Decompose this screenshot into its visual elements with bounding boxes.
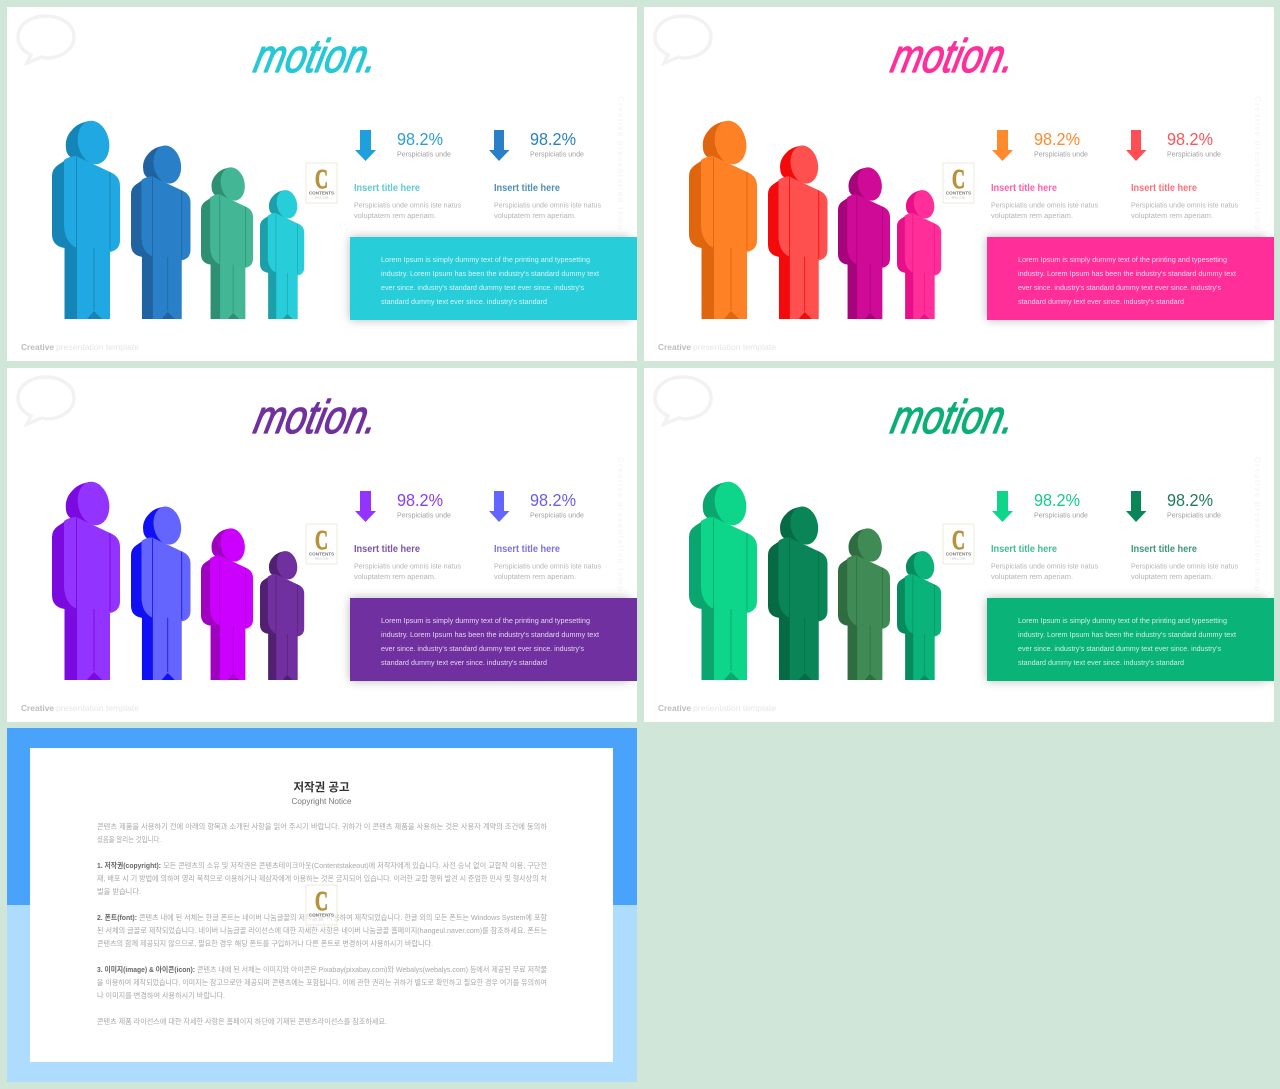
notice heading xyxy=(292,780,352,806)
text block 1 xyxy=(991,544,1098,581)
footer xyxy=(21,343,140,352)
footer: Creative xyxy=(21,704,55,713)
stat 1 xyxy=(1034,490,1088,520)
icon: down arrow 1 xyxy=(992,491,1013,522)
logo: C xyxy=(315,886,328,916)
section 2: 콘텐츠 내에 된 서체는 한글 폰트는 네이버 나눔글꼴의 저작물을 사용하여 제작되었습니다. 한글 외의 모든 폰트는 Windows System에 포함 xyxy=(139,913,547,922)
logo xyxy=(943,524,974,564)
vertical watermark: Creative presentation temp xyxy=(1253,96,1262,232)
footer: presentation template xyxy=(693,704,777,713)
stat 2 xyxy=(1167,129,1221,158)
stat 1: Perspiciatis unde xyxy=(1034,152,1088,158)
vertical watermark: Creative presentation temp xyxy=(1253,457,1262,593)
section 3: 나 이미지를 변경하여 사용하시기 바랍니다. xyxy=(97,991,225,1000)
text block 1 xyxy=(354,544,461,581)
logo: CONTENTS xyxy=(946,190,971,196)
callout box: ever since. industry's standard dummy text ever since. industry's xyxy=(381,285,585,292)
people chart xyxy=(689,118,941,319)
text block 1 xyxy=(991,183,1098,220)
intro paragraph: 콘텐츠 제품을 사용하기 전에 아래의 항목과 소개된 사항을 읽어 주시기 바랍니다. 귀하가 이 콘텐츠 제품을 사용하는 것은 사용자 계약의 조건에 동의하 xyxy=(97,822,547,831)
stat 1: Perspiciatis unde xyxy=(397,152,451,158)
footer: presentation template xyxy=(693,343,777,352)
title: motion. xyxy=(249,31,384,83)
logo xyxy=(306,163,337,203)
text block 2: voluptatem rem aperiam. xyxy=(1131,574,1213,581)
text block 2: voluptatem rem aperiam. xyxy=(494,574,576,581)
logo: MALL.COM xyxy=(315,556,328,560)
logo xyxy=(943,163,974,203)
people chart xyxy=(689,479,941,680)
stat 1: Perspiciatis unde xyxy=(397,512,451,520)
text block 1: Perspiciatis unde omnis iste natus xyxy=(354,564,461,570)
text block 1: voluptatem rem aperiam. xyxy=(991,213,1073,220)
callout box: standard dummy text ever since. industry's standard xyxy=(381,660,547,667)
callout box: ever since. industry's standard dummy text ever since. industry's xyxy=(381,646,585,653)
stat 2: 98.2% xyxy=(1167,490,1213,510)
stat 2: 98.2% xyxy=(530,490,576,510)
stat 2: Perspiciatis unde xyxy=(1167,512,1221,520)
text block 2: Insert title here xyxy=(494,183,560,194)
footer: Creative xyxy=(21,343,55,352)
callout box xyxy=(350,237,637,320)
footer: presentation template xyxy=(56,343,140,352)
panel: pink motion slide xyxy=(644,7,1274,361)
callout box: industry. Lorem Ipsum has been the industry's standard dummy text xyxy=(381,271,599,278)
icon: down arrow 2 xyxy=(1126,130,1146,161)
callout box xyxy=(987,598,1274,681)
callout box: Lorem Ipsum is simply dummy text of the printing and typesetting xyxy=(1018,618,1227,625)
vertical watermark: Creative presentation temp xyxy=(616,457,625,593)
notice heading: Copyright Notice xyxy=(292,797,352,806)
callout box: ever since. industry's standard dummy text ever since. industry's xyxy=(1018,285,1222,292)
stat 2: 98.2% xyxy=(530,129,576,149)
text block 1: Insert title here xyxy=(991,544,1057,555)
icon: speech bubble xyxy=(655,16,711,63)
text block 1: voluptatem rem aperiam. xyxy=(354,574,436,581)
logo: C xyxy=(952,525,965,555)
text block 1: Insert title here xyxy=(354,183,420,194)
text block 1: Perspiciatis unde omnis iste natus xyxy=(354,202,461,210)
callout box: industry. Lorem Ipsum has been the industry's standard dummy text xyxy=(1018,271,1236,278)
text block 2: Perspiciatis unde omnis iste natus xyxy=(1131,202,1238,210)
panel: blue motion slide xyxy=(7,7,637,361)
text block 2: Insert title here xyxy=(1131,183,1197,194)
panel: copyright notice xyxy=(7,728,637,1082)
text block 2: voluptatem rem aperiam. xyxy=(494,213,576,220)
logo: CONTENTS xyxy=(309,552,334,556)
stat 1: Perspiciatis unde xyxy=(1034,512,1088,520)
logo xyxy=(306,524,337,564)
section 2: 된 서체의 글꼴로 제작되었습니다. 네이버 나눔글꼴 라이선스에 대한 자세한 사항은 네이버 나눔글꼴 홈페이지(hangeul.naver.com)를 참조하세요. 폰트는 xyxy=(97,926,547,935)
logo: C xyxy=(952,164,965,194)
stat 2 xyxy=(530,490,584,520)
callout box xyxy=(987,237,1274,320)
text block 1: voluptatem rem aperiam. xyxy=(991,574,1073,581)
logo: MALL.COM xyxy=(952,196,965,200)
people chart xyxy=(52,118,304,319)
people chart xyxy=(52,479,304,680)
footer: Creative xyxy=(658,704,692,713)
icon: down arrow 2 xyxy=(1126,491,1146,522)
title: motion. xyxy=(886,31,1021,83)
text block 2 xyxy=(1131,544,1238,581)
panel: green motion slide xyxy=(644,368,1274,722)
stat 2: Perspiciatis unde xyxy=(530,512,584,520)
text block 2: Perspiciatis unde omnis iste natus xyxy=(1131,564,1238,570)
section 3 xyxy=(97,965,547,1000)
notice heading: 저작권 공고 xyxy=(293,780,350,794)
icon: down arrow 1 xyxy=(355,491,376,522)
callout box: industry. Lorem Ipsum has been the industry's standard dummy text xyxy=(1018,632,1236,639)
callout box: Lorem Ipsum is simply dummy text of the printing and typesetting xyxy=(381,257,590,264)
logo: CONTENTS xyxy=(946,552,971,556)
stat 2 xyxy=(1167,490,1221,520)
stat 2: Perspiciatis unde xyxy=(530,152,584,158)
section 2 xyxy=(97,913,547,948)
section 3: 을 이용하여 제작되었습니다. 이미지는 참고으로만 제공되며 콘텐츠에는 포함됩니다. 이에 관한 권리는 귀하가 별도로 확인하고 필요한 경우 여기를 유의하여 xyxy=(97,978,547,987)
vertical watermark: Creative presentation temp xyxy=(616,96,625,232)
logo: CONTENTS xyxy=(309,912,334,918)
text block 2: Perspiciatis unde omnis iste natus xyxy=(494,202,601,210)
intro paragraph xyxy=(97,822,547,844)
section 1: 벌을 받습니다. xyxy=(97,887,141,896)
footer xyxy=(21,704,140,713)
text block 1: Insert title here xyxy=(354,544,420,555)
section 1: 1. 저작권(copyright): xyxy=(97,861,161,870)
callout box xyxy=(350,598,637,681)
text block 2: Perspiciatis unde omnis iste natus xyxy=(494,564,601,570)
text block 1: voluptatem rem aperiam. xyxy=(354,213,436,220)
callout box: standard dummy text ever since. industry's standard xyxy=(1018,660,1184,667)
stat 2: 98.2% xyxy=(1167,129,1213,149)
section 1: 모든 콘텐츠의 소유 및 저작권은 콘텐츠테이크아웃(Contentstakeout)에 저작자에게 있습니다. 사전 승낙 없이 교합적 이용, 구단전 xyxy=(163,861,547,870)
footer: Creative xyxy=(658,343,692,352)
section 2: 2. 폰트(font): xyxy=(97,913,137,922)
callout box: Lorem Ipsum is simply dummy text of the printing and typesetting xyxy=(381,618,590,625)
text block 1: Insert title here xyxy=(991,183,1057,194)
intro paragraph: 셨음을 알리는 것입니다. xyxy=(97,835,161,844)
text block 1: Perspiciatis unde omnis iste natus xyxy=(991,202,1098,210)
section 2: 콘텐츠의 함께 제공되지 않으므로, 필요한 경우 해당 폰트를 구입하거나 다른 폰트로 변경하여 사용하시기 바랍니다. xyxy=(97,939,433,948)
text block 2: Insert title here xyxy=(1131,544,1197,555)
icon: down arrow 1 xyxy=(992,130,1013,161)
stat 1: 98.2% xyxy=(1034,129,1080,149)
stat 1 xyxy=(397,490,451,520)
stat 1: 98.2% xyxy=(1034,490,1080,510)
stat 2: Perspiciatis unde xyxy=(1167,152,1221,158)
icon: down arrow 2 xyxy=(489,130,510,161)
stat 2 xyxy=(530,129,584,158)
text block 2 xyxy=(494,183,601,220)
callout box: Lorem Ipsum is simply dummy text of the printing and typesetting xyxy=(1018,257,1227,264)
logo: MALL.COM xyxy=(315,196,328,200)
footer xyxy=(658,704,777,713)
text block 2 xyxy=(494,544,601,581)
text block 2: Insert title here xyxy=(494,544,560,555)
section 3: 콘텐츠 내에 된 서체는 이미지와 아이콘은 Pixabay(pixabay.com)와 Webalys(webalys.com) 등에서 제공된 무료 저작물 xyxy=(197,965,547,974)
logo: MALL.COM xyxy=(952,556,965,560)
callout box: standard dummy text ever since. industry's standard xyxy=(1018,299,1184,306)
icon: speech bubble xyxy=(18,377,74,424)
title: motion. xyxy=(249,392,384,444)
logo xyxy=(306,885,337,925)
logo: C xyxy=(315,164,328,194)
logo: CONTENTS xyxy=(309,190,334,196)
stat 1: 98.2% xyxy=(397,490,443,510)
icon: speech bubble xyxy=(655,377,711,424)
callout box: industry. Lorem Ipsum has been the industry's standard dummy text xyxy=(381,632,599,639)
stat 1 xyxy=(1034,129,1088,158)
text block 1 xyxy=(354,183,461,220)
section 3: 3. 이미지(image) & 아이콘(icon): xyxy=(97,965,195,974)
callout box: ever since. industry's standard dummy text ever since. industry's xyxy=(1018,646,1222,653)
icon: down arrow 1 xyxy=(355,130,376,161)
stat 1 xyxy=(397,129,451,158)
section 1 xyxy=(97,861,547,896)
panel: purple motion slide xyxy=(7,368,637,722)
title: motion. xyxy=(886,392,1021,444)
callout box: standard dummy text ever since. industry's standard xyxy=(381,299,547,306)
text block 1: Perspiciatis unde omnis iste natus xyxy=(991,564,1098,570)
footer: presentation template xyxy=(56,704,140,713)
stat 1: 98.2% xyxy=(397,129,443,149)
icon: down arrow 2 xyxy=(489,491,510,522)
text block 2: voluptatem rem aperiam. xyxy=(1131,213,1213,220)
section 1: 재, 배포 시 기 방법에 의하여 영리 목적으로 이용하거나 제삼자에게 이용하는 것은 금지되어 있습니다. 이러한 교합 행위 발견 시 준엄한 민사 및 형사상의 처 xyxy=(97,874,547,883)
icon: speech bubble xyxy=(18,16,74,63)
logo: C xyxy=(315,525,328,555)
closing line: 콘텐츠 제품 라이선스에 대한 자세한 사항은 홈페이지 하단에 기재된 콘텐츠라이선스를 참조하세요. xyxy=(97,1017,387,1026)
footer xyxy=(658,343,777,352)
text block 2 xyxy=(1131,183,1238,220)
